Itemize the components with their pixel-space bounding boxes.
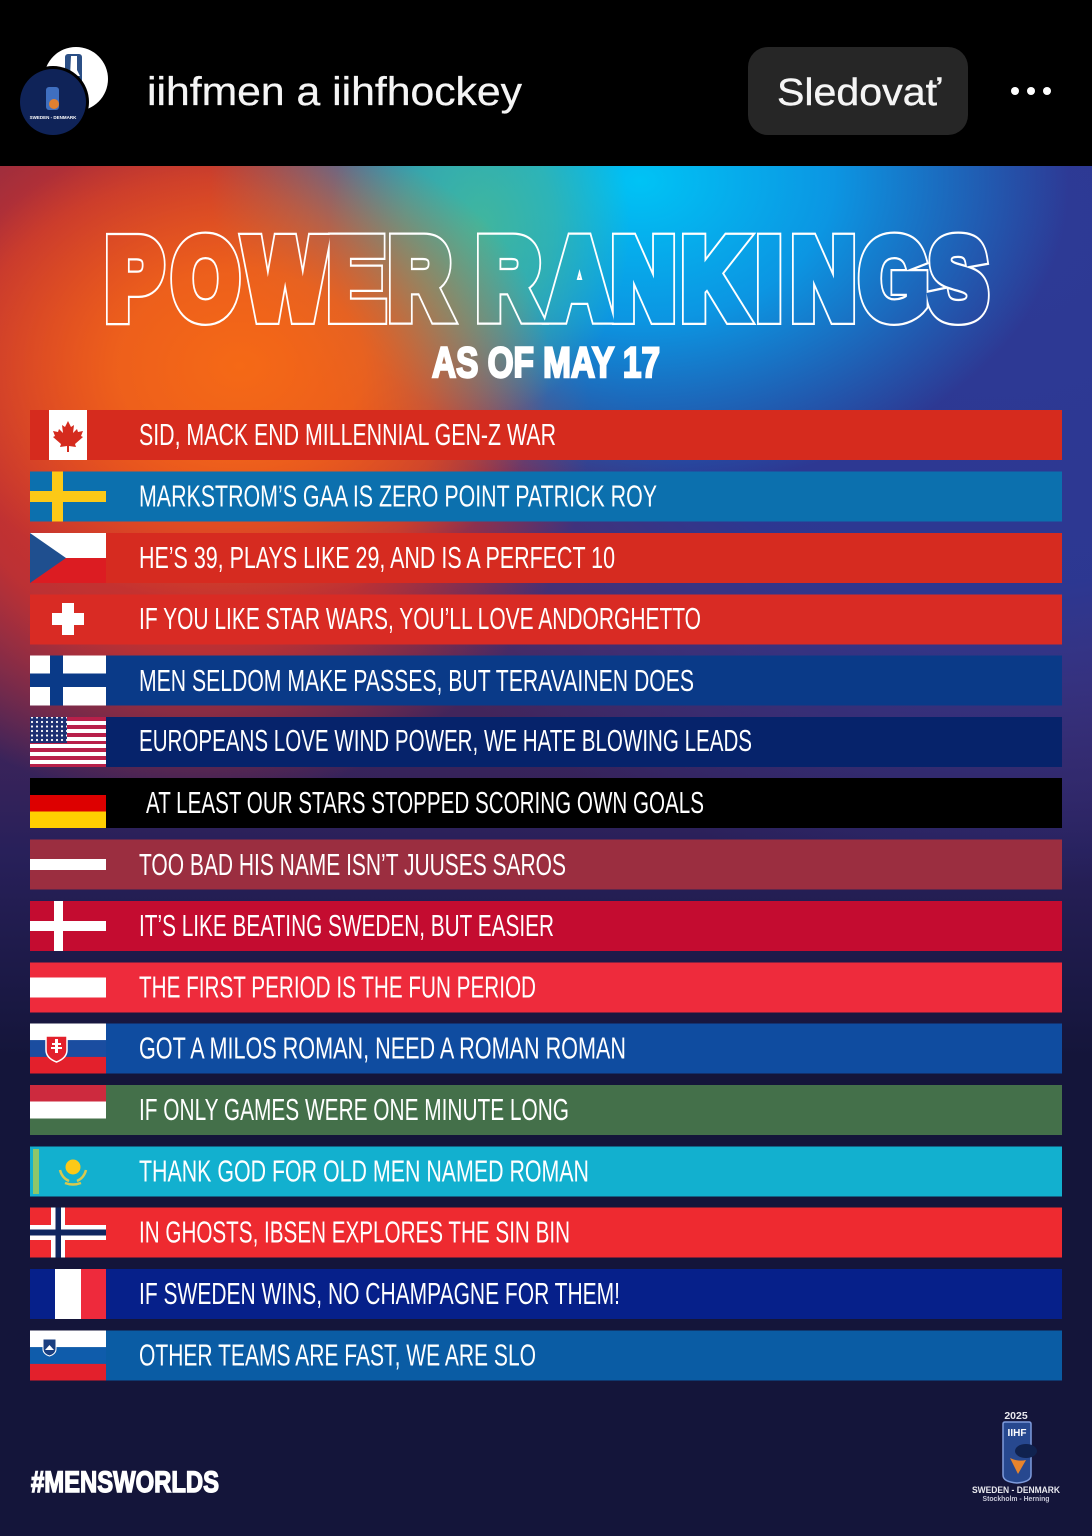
row: Slovenia: OTHER TEAMS ARE FAST, WE ARE SLO: [139, 1338, 536, 1372]
flag: France: [55, 1269, 106, 1319]
tournament logo: IIHF: [1008, 1428, 1026, 1439]
row: Slovakia: [30, 1024, 1062, 1074]
flag: Slovakia: [30, 1024, 106, 1074]
row: Austria: [30, 962, 1062, 1012]
flag: Switzerland: [52, 603, 84, 635]
row: France: [30, 1269, 1062, 1319]
row: Hungary: IF ONLY GAMES WERE ONE MINUTE LONG: [139, 1092, 569, 1127]
row: Finland: [30, 656, 1062, 706]
tournament logo: [972, 1410, 1060, 1503]
flag: Canada: [49, 410, 87, 460]
row: Sweden: MARKSTROM’S GAA IS ZERO POINT PATRICK ROY: [139, 478, 657, 514]
row: Slovakia: GOT A MILOS ROMAN, NEED A ROMAN ROMAN: [139, 1030, 626, 1066]
follow button: Sledovať: [777, 72, 942, 114]
hashtag: #MENSWORLDS: [31, 1466, 219, 1499]
row: Kazakhstan: THANK GOD FOR OLD MEN NAMED ROMAN: [139, 1154, 589, 1188]
row: Hungary: [30, 1085, 1062, 1135]
row: USA: EUROPEANS LOVE WIND POWER, WE HATE BLOWING LEADS: [139, 723, 752, 758]
flag: Slovenia: [30, 1330, 106, 1380]
flag: Kazakhstan: [33, 1149, 86, 1194]
row: Germany: [30, 778, 1062, 828]
row: Kazakhstan: [30, 1146, 1062, 1196]
account names: iihfmen a iihfhockey: [147, 70, 522, 114]
follow button: [748, 47, 968, 135]
avatar: iihf men: SWEDEN - DENMARK: [30, 115, 77, 120]
row: Denmark: [30, 901, 1062, 951]
title: [106, 232, 990, 326]
row: Latvia: TOO BAD HIS NAME ISN’T JUUSES SAROS: [139, 847, 566, 882]
avatar: iihf hockey: [44, 47, 108, 111]
flag: Finland: [30, 656, 106, 706]
flag: Hungary: [30, 1085, 106, 1118]
more menu icon: [1011, 87, 1051, 95]
row: Sweden: [30, 472, 1062, 522]
row: Norway: IN GHOSTS, IBSEN EXPLORES THE SIN BIN: [139, 1214, 570, 1250]
row: Switzerland: IF YOU LIKE STAR WARS, YOU’LL LOVE ANDORGHETTO: [139, 601, 701, 636]
row: Switzerland: [30, 594, 1062, 644]
flag: Sweden: [30, 472, 106, 522]
subtitle: AS OF MAY 17: [432, 339, 660, 387]
flag: Czechia: [30, 533, 106, 583]
flag: Denmark: [30, 901, 106, 951]
row: Austria: THE FIRST PERIOD IS THE FUN PERIOD: [139, 970, 536, 1004]
row: Germany: AT LEAST OUR STARS STOPPED SCORING OWN GOALS: [146, 785, 704, 820]
row: USA: [30, 717, 1062, 767]
tournament logo: 2025: [1004, 1410, 1028, 1422]
row: Norway: [30, 1208, 1062, 1258]
flag: USA: [30, 717, 106, 767]
tournament logo: SWEDEN - DENMARK: [972, 1485, 1060, 1496]
flag: Latvia: [30, 859, 106, 870]
tournament logo: Stockholm - Herning: [982, 1496, 1050, 1503]
avatar: iihf men: [17, 66, 89, 138]
row: Czechia: [30, 533, 1062, 583]
flag: Austria: [30, 978, 106, 998]
flag: Germany: [30, 795, 106, 828]
header bar: [0, 0, 1092, 166]
row: Canada: [30, 410, 1062, 460]
row: France: IF SWEDEN WINS, NO CHAMPAGNE FOR THEM!: [139, 1276, 620, 1311]
row: Slovenia: [30, 1330, 1062, 1380]
row: Finland: MEN SELDOM MAKE PASSES, BUT TERAVAINEN DOES: [139, 663, 694, 698]
row: Czechia: HE’S 39, PLAYS LIKE 29, AND IS A PERFECT 10: [139, 540, 615, 575]
row: Latvia: [30, 840, 1062, 890]
flag: Norway: [30, 1208, 106, 1258]
row: Canada: SID, MACK END MILLENNIAL GEN-Z WAR: [139, 417, 556, 452]
row: Denmark: IT’S LIKE BEATING SWEDEN, BUT EASIER: [139, 908, 554, 943]
